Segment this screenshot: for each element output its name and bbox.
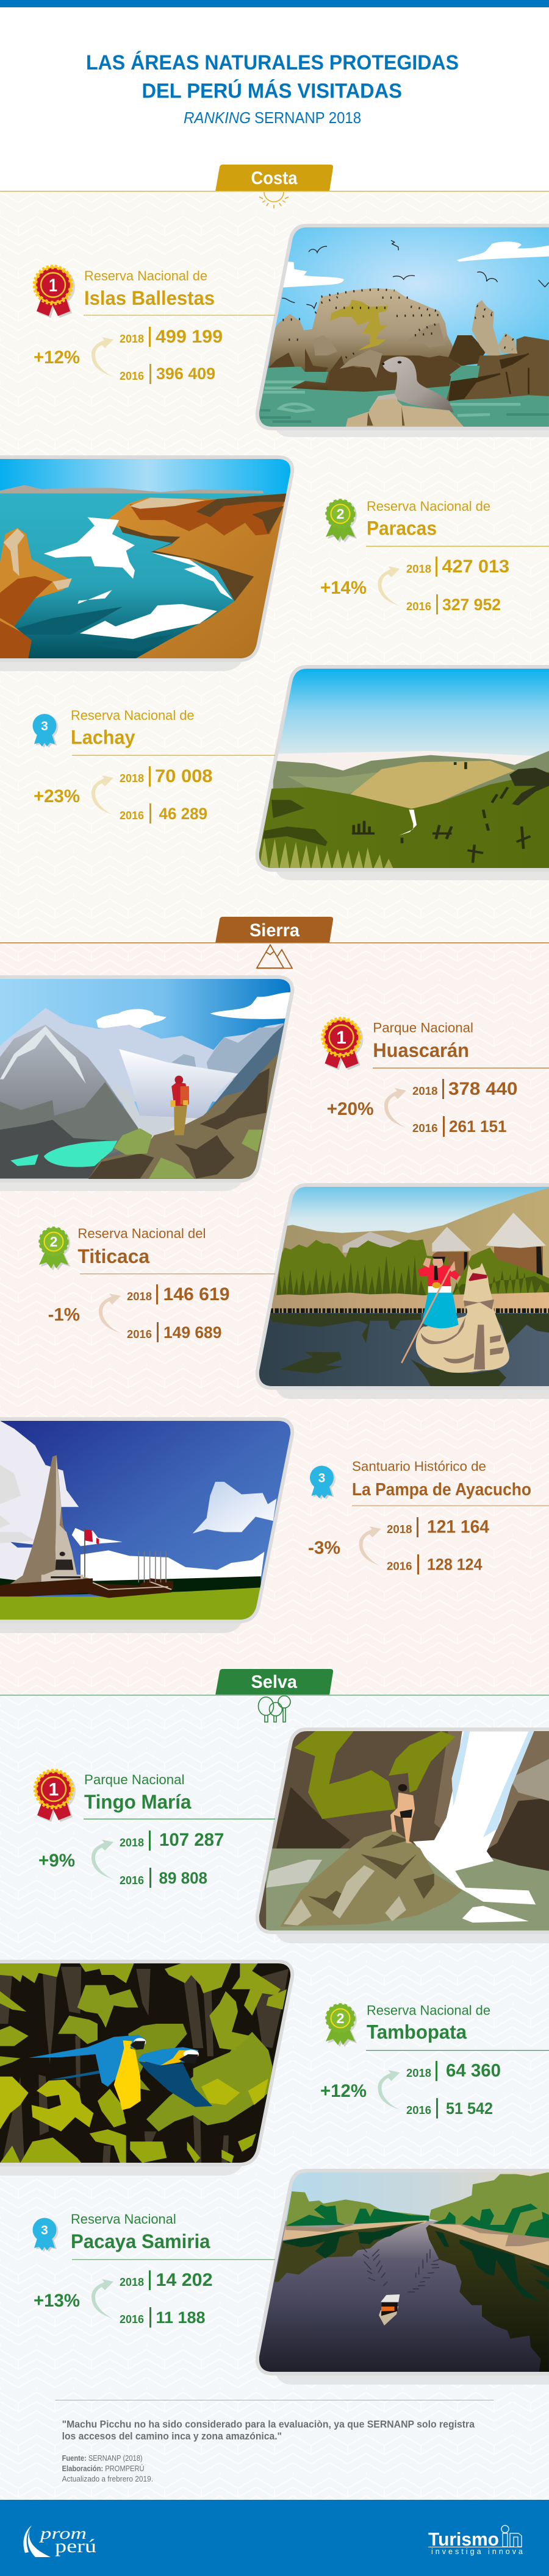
arrow bbox=[378, 566, 400, 606]
medal: rank 1 bbox=[34, 266, 75, 318]
hiker bbox=[171, 1076, 189, 1135]
section background: Sierra bbox=[0, 943, 549, 1695]
heading: Islas Ballestas: Reserva Nacional de bbox=[84, 268, 207, 283]
arrow bbox=[359, 1526, 381, 1566]
stat: 2016 visitors: 261 151 bbox=[449, 1117, 507, 1136]
stat: 2018 visitors: 378 440 bbox=[448, 1079, 517, 1099]
lake bbox=[10, 1141, 117, 1167]
panel: Lachay stats bbox=[33, 708, 275, 824]
right rocks bbox=[447, 301, 549, 400]
illustration: Tambopata bbox=[0, 1963, 293, 2176]
illustration: Lachay bbox=[256, 666, 549, 880]
stat: 2018 visitors: 146 619 bbox=[163, 1284, 229, 1304]
plants bbox=[114, 1128, 262, 1179]
illustration: La Pampa de Ayacucho bbox=[0, 1417, 294, 1633]
stat: 2018 visitors bbox=[120, 2270, 212, 2290]
panel: Titicaca stats bbox=[39, 1226, 275, 1342]
rock stack bbox=[0, 528, 72, 660]
macaw 2 bbox=[137, 2047, 212, 2107]
stat: 2018 visitors bbox=[120, 766, 212, 786]
medal: rank 3 bbox=[33, 2218, 59, 2252]
illustration: Titicaca bbox=[256, 1183, 549, 1399]
wake bbox=[361, 2245, 447, 2292]
stat: 2018 visitors: 2018 bbox=[120, 1836, 144, 1849]
stat: 2018 visitors: 107 287 bbox=[159, 1830, 224, 1850]
heading: Islas Ballestas bbox=[84, 268, 215, 309]
heading: Islas Ballestas: Islas Ballestas bbox=[84, 287, 215, 309]
cacti bbox=[352, 762, 531, 863]
heading: Lachay bbox=[71, 708, 194, 749]
medal: rank 1: 1 bbox=[49, 1780, 59, 1799]
heading: Paracas: Reserva Nacional de bbox=[367, 499, 490, 514]
waterfall bbox=[413, 1731, 536, 1923]
medal: rank 2 bbox=[326, 2004, 357, 2047]
heading: Tingo María bbox=[84, 1772, 192, 1813]
stat: 2016 visitors bbox=[120, 1868, 207, 1888]
panel: Huascarán stats bbox=[322, 1018, 549, 1137]
subtitle: SERNANP 2018 bbox=[254, 109, 361, 127]
right tree line bbox=[428, 2172, 549, 2266]
growth percentage: +23% bbox=[34, 786, 80, 806]
medal: rank 3: 3 bbox=[41, 2224, 48, 2237]
stat: 2016 visitors: 327 952 bbox=[442, 596, 501, 614]
stat: 2016 visitors bbox=[406, 594, 501, 614]
medal: rank 2: 2 bbox=[50, 1234, 57, 1250]
river reflections bbox=[274, 2222, 549, 2373]
stat: 2016 visitors: 2016 bbox=[120, 1874, 144, 1887]
title: DEL PERÚ MÁS VISITADAS bbox=[142, 79, 402, 102]
heading: Tambopata: Tambopata bbox=[367, 2021, 467, 2043]
man on rock bbox=[390, 1784, 415, 1843]
stat: 2018 visitors: 2018 bbox=[120, 2275, 144, 2288]
section tab: Selva: Selva bbox=[251, 1672, 297, 1692]
stat: 2018 visitors: 2018 bbox=[412, 1084, 438, 1097]
heading: Lachay: Reserva Nacional de bbox=[71, 708, 194, 723]
medal: rank 1: 1 bbox=[49, 276, 57, 296]
heading: Pacaya Samiria bbox=[71, 2211, 210, 2252]
foliage bbox=[294, 1731, 396, 1819]
stat: 2016 visitors: 2016 bbox=[406, 2104, 431, 2116]
foliage back bbox=[0, 1963, 287, 2016]
section tab: Sierra bbox=[0, 917, 549, 944]
arrow bbox=[378, 2070, 400, 2110]
stat: 2016 visitors bbox=[406, 2098, 493, 2119]
heading: Pacaya Samiria: Reserva Nacional bbox=[71, 2211, 176, 2227]
stat: 2018 visitors: 14 202 bbox=[156, 2270, 212, 2290]
panel: La Pampa de Ayacucho stats bbox=[308, 1459, 549, 1574]
section tab: Sierra: Sierra bbox=[249, 920, 300, 941]
huts bbox=[343, 1213, 546, 1276]
panel: Islas Ballestas stats bbox=[34, 266, 275, 384]
heading: Paracas: Paracas bbox=[367, 517, 437, 539]
illustration: Islas Ballestas bbox=[256, 226, 549, 437]
title: LAS ÁREAS NATURALES PROTEGIDAS bbox=[86, 51, 459, 74]
stat: 2018 visitors: 121 164 bbox=[427, 1517, 489, 1537]
source credits: Actualizado a frebrero 2019. bbox=[62, 2474, 153, 2483]
growth percentage: +12% bbox=[34, 347, 80, 368]
panel: Tambopata stats bbox=[320, 2003, 549, 2119]
woman rowing bbox=[401, 1251, 459, 1363]
stat: 2016 visitors: 2016 bbox=[387, 1559, 412, 1573]
stat: 2016 visitors: 2016 bbox=[406, 600, 431, 613]
heading: Huascarán: Huascarán bbox=[373, 1039, 469, 1061]
stat: 2018 visitors bbox=[120, 1830, 224, 1851]
medal: rank 2 bbox=[326, 500, 357, 543]
flag bbox=[85, 1528, 99, 1577]
stat: 2016 visitors: 2016 bbox=[127, 1328, 152, 1340]
arrow bbox=[92, 1840, 113, 1879]
heading: Tingo María: Tingo María bbox=[84, 1791, 192, 1813]
footer band bbox=[0, 2500, 549, 2576]
rock bbox=[280, 1829, 462, 1927]
top blue bar bbox=[0, 0, 549, 7]
stat: 2018 visitors bbox=[406, 557, 509, 577]
growth percentage: -1% bbox=[48, 1304, 80, 1325]
heading: Lachay: Lachay bbox=[71, 727, 135, 749]
medal: rank 1: 1 bbox=[336, 1028, 346, 1048]
section tab: Selva bbox=[0, 1669, 549, 1696]
medal: rank 2: 2 bbox=[337, 2010, 344, 2026]
boat bbox=[379, 2294, 400, 2325]
stat: 2018 visitors: 2018 bbox=[406, 2066, 431, 2079]
panel: Paracas stats bbox=[320, 499, 549, 614]
logo: Turismo In bbox=[428, 2525, 523, 2556]
arrow bbox=[92, 2279, 113, 2319]
logo: Turismo In: Turismo bbox=[428, 2528, 499, 2550]
stat: 2018 visitors: 2018 bbox=[387, 1523, 412, 1535]
medal: rank 1 bbox=[34, 1770, 76, 1822]
medal: rank 1 bbox=[322, 1018, 364, 1070]
foliage mass bbox=[146, 2032, 273, 2132]
section background: Selva bbox=[0, 1695, 549, 2500]
stat: 2016 visitors bbox=[120, 803, 207, 824]
growth percentage: +12% bbox=[320, 2081, 367, 2101]
stat: 2016 visitors: 51 542 bbox=[446, 2099, 493, 2118]
stat: 2016 visitors bbox=[387, 1554, 482, 1574]
medal: rank 2: 2 bbox=[337, 506, 344, 522]
growth percentage: +14% bbox=[320, 578, 367, 598]
growth percentage: +13% bbox=[34, 2291, 80, 2311]
reeds bbox=[276, 1239, 549, 1295]
seal bbox=[346, 357, 464, 427]
stat: 2018 visitors: 2018 bbox=[406, 562, 431, 575]
heading: Titicaca bbox=[77, 1226, 206, 1267]
left tree line bbox=[282, 2191, 429, 2240]
medal: rank 3: 3 bbox=[318, 1471, 325, 1485]
heading: La Pampa de Ayacucho: La Pampa de Ayacucho bbox=[352, 1480, 531, 1500]
grass bbox=[259, 838, 394, 870]
heading: Huascarán: Parque Nacional bbox=[373, 1020, 473, 1035]
stat: 2018 visitors: 2018 bbox=[120, 772, 144, 785]
arrow bbox=[92, 337, 113, 377]
heading: Tingo María: Parque Nacional bbox=[84, 1772, 184, 1787]
stat: 2016 visitors bbox=[127, 1322, 221, 1342]
stat: 2016 visitors: 396 409 bbox=[156, 365, 215, 383]
stat: 2018 visitors: 2018 bbox=[127, 1290, 152, 1303]
stat: 2016 visitors bbox=[120, 364, 215, 384]
stat: 2018 visitors bbox=[412, 1079, 517, 1099]
obelisk monument bbox=[0, 1455, 173, 1598]
macaw 1 bbox=[29, 2035, 146, 2110]
illustration: Pacaya Samiria bbox=[256, 2170, 549, 2385]
logo: Turismo In: investiga innova bbox=[431, 2547, 523, 2556]
stat: 2016 visitors bbox=[120, 2307, 205, 2327]
arrow bbox=[384, 1088, 406, 1128]
source credits bbox=[62, 2453, 153, 2483]
heading: Titicaca: Reserva Nacional del bbox=[77, 1226, 206, 1241]
nesting birds on rocks bbox=[282, 290, 514, 358]
arrow bbox=[92, 775, 113, 815]
medal: rank 2 bbox=[39, 1228, 70, 1270]
tree trunks bbox=[0, 1967, 289, 2163]
stat: 2016 visitors: 2016 bbox=[120, 809, 144, 822]
source credits: Elaboración: PROMPERÚ bbox=[62, 2464, 145, 2473]
medal: rank 3 bbox=[33, 714, 59, 748]
stat: 2018 visitors bbox=[120, 327, 223, 347]
stat: 2016 visitors: 2016 bbox=[412, 1122, 438, 1134]
stat: 2018 visitors bbox=[406, 2061, 501, 2081]
stat: 2018 visitors: 70 008 bbox=[155, 766, 212, 786]
growth percentage: +9% bbox=[38, 1851, 75, 1871]
panel: Pacaya Samiria stats bbox=[33, 2211, 275, 2327]
stat: 2018 visitors: 2018 bbox=[120, 332, 144, 345]
reed boat bbox=[416, 1263, 509, 1373]
logo: PromPerú bbox=[23, 2524, 96, 2557]
note: Machu Picchu: "Machu Picchu no ha sido considerado para la evaluaciòn, ya que SERNANP solo registra bbox=[62, 2419, 475, 2430]
subtitle: RANKING bbox=[184, 109, 251, 127]
heading: Huascarán bbox=[373, 1020, 473, 1061]
logo: PromPerú: perú bbox=[55, 2535, 96, 2556]
note: Machu Picchu: los accesos del camino inca y zona amazónica." bbox=[62, 2431, 282, 2442]
icon: trees bbox=[259, 1696, 290, 1722]
subtitle bbox=[184, 109, 361, 127]
heading: La Pampa de Ayacucho: Santuario Histórico de bbox=[352, 1459, 486, 1474]
note: Machu Picchu bbox=[62, 2419, 475, 2442]
arrow bbox=[99, 1293, 121, 1333]
stat: 2016 visitors: 149 689 bbox=[163, 1323, 221, 1342]
main guano rock bbox=[268, 288, 475, 392]
stat: 2018 visitors: 499 199 bbox=[156, 327, 223, 347]
section background: Costa bbox=[0, 191, 549, 943]
stat: 2016 visitors: 2016 bbox=[120, 369, 144, 382]
heading: Tambopata: Reserva Nacional de bbox=[367, 2003, 490, 2018]
panel: Tingo María stats bbox=[34, 1770, 275, 1888]
illustration: Huascarán bbox=[0, 976, 294, 1191]
source credits: Fuente: SERNANP (2018) bbox=[62, 2453, 143, 2463]
stat: 2016 visitors: 11 188 bbox=[156, 2308, 205, 2327]
illustration: Tingo María bbox=[256, 1728, 549, 1943]
icon: sun bbox=[259, 192, 289, 208]
stat: 2018 visitors bbox=[127, 1284, 229, 1304]
stat: 2016 visitors: 2016 bbox=[120, 2313, 144, 2325]
heading: Paracas bbox=[367, 499, 490, 539]
section tab: Costa: Costa bbox=[251, 168, 298, 188]
stat: 2016 visitors: 46 289 bbox=[159, 805, 207, 823]
medal: rank 3 bbox=[310, 1465, 336, 1500]
section tab: Costa bbox=[0, 165, 549, 191]
growth percentage: +20% bbox=[327, 1099, 374, 1119]
heading: Pacaya Samiria: Pacaya Samiria bbox=[71, 2230, 210, 2252]
stat: 2018 visitors: 427 013 bbox=[442, 557, 509, 577]
heading: Tambopata bbox=[367, 2003, 490, 2043]
medal: rank 3: 3 bbox=[41, 719, 48, 733]
heading: La Pampa de Ayacucho bbox=[352, 1459, 531, 1500]
icon: mountains bbox=[257, 945, 292, 968]
illustration: Paracas bbox=[0, 456, 294, 671]
stat: 2016 visitors: 89 808 bbox=[159, 1869, 207, 1887]
title bbox=[86, 51, 459, 102]
logo: PromPerú: prom bbox=[38, 2524, 87, 2542]
stat: 2018 visitors bbox=[387, 1517, 489, 1537]
growth percentage: -3% bbox=[308, 1538, 340, 1558]
stat: 2016 visitors: 128 124 bbox=[427, 1556, 482, 1574]
stat: 2018 visitors: 64 360 bbox=[446, 2061, 501, 2081]
heading: Titicaca: Titicaca bbox=[77, 1245, 149, 1267]
stat: 2016 visitors bbox=[412, 1116, 507, 1137]
